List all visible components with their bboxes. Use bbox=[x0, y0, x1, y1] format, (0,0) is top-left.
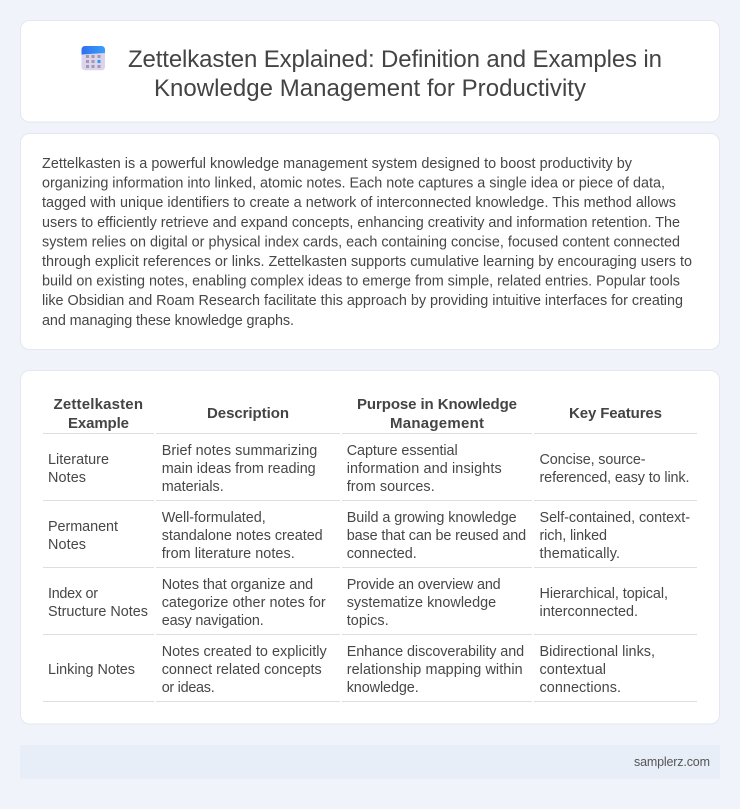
panel: examples table bbox=[20, 370, 720, 724]
table row: permanent notes: Self-contained, context- bbox=[540, 510, 690, 526]
table row: index or structure notes bbox=[43, 577, 697, 635]
table header row: Zettelkasten bbox=[54, 396, 143, 413]
table row: permanent notes: Permanent bbox=[48, 519, 118, 535]
text block: definition: and managing these knowledge graphs. bbox=[42, 313, 294, 329]
table row: index or structure notes: Provide an overview and bbox=[347, 577, 501, 593]
table row: linking notes: connect related concepts bbox=[162, 662, 322, 678]
text block: definition: system relies on digital or physical index cards, each containing concise, focused content connected bbox=[42, 234, 680, 250]
table row: index or structure notes: Hierarchical, topical, bbox=[540, 586, 668, 602]
panel: intro paragraph bbox=[20, 134, 720, 350]
table row: literature notes: Capture essential bbox=[347, 443, 458, 459]
table row: linking notes: Linking Notes bbox=[48, 662, 135, 678]
table row: linking notes: knowledge. bbox=[347, 680, 419, 696]
table row: literature notes: Brief notes summarizing bbox=[162, 443, 317, 459]
title bbox=[128, 46, 662, 102]
table header row bbox=[43, 396, 697, 434]
text block: definition: like Obsidian and Roam Research facilitate this approach by providing intuitive interfaces for creating bbox=[42, 293, 683, 309]
table row: literature notes: main ideas from reading bbox=[162, 461, 316, 477]
footer: samplerz.com bbox=[634, 755, 710, 769]
text block: definition: build on existing notes, enabling complex ideas to emerge from simple, related entries. Popular tools bbox=[42, 274, 680, 290]
table row: literature notes: referenced, easy to link. bbox=[540, 470, 690, 486]
text block: definition: Zettelkasten is a powerful knowledge management system designed to boost productivity by bbox=[42, 156, 633, 172]
table row: permanent notes: standalone notes created bbox=[162, 528, 323, 544]
table row: index or structure notes: topics. bbox=[347, 613, 389, 629]
table row: permanent notes: Well-formulated, bbox=[162, 510, 266, 526]
table row: linking notes: contextual bbox=[540, 662, 606, 678]
table row: index or structure notes: systematize knowledge bbox=[347, 595, 496, 611]
table row: linking notes: or ideas. bbox=[162, 680, 215, 696]
table row: linking notes: relationship mapping within bbox=[347, 662, 523, 678]
table row: linking notes: Notes created to explicitly bbox=[162, 644, 327, 660]
table row: literature notes: information and insights bbox=[347, 461, 502, 477]
table row: permanent notes: Notes bbox=[48, 537, 86, 553]
table row: linking notes: connections. bbox=[540, 680, 621, 696]
table row: literature notes: Concise, source- bbox=[540, 452, 646, 468]
table row: literature notes: from sources. bbox=[347, 479, 435, 495]
text block: definition: organizing information into linked, atomic notes. Each note captures a single idea or piece of data, bbox=[42, 176, 665, 192]
table row: linking notes: Enhance discoverability and bbox=[347, 644, 524, 660]
table row: permanent notes: rich, linked bbox=[540, 528, 607, 544]
text block: definition: users to efficiently retrieve and expand concepts, enhancing creativity and information retention. The bbox=[42, 215, 680, 231]
table row: linking notes: Bidirectional links, bbox=[540, 644, 655, 660]
table header row: Management bbox=[390, 415, 484, 432]
table row: permanent notes: connected. bbox=[347, 546, 417, 562]
icon: calendar bbox=[82, 46, 105, 70]
table row: permanent notes: thematically. bbox=[540, 546, 620, 562]
panel: title header bbox=[20, 20, 720, 122]
table row: permanent notes bbox=[43, 510, 697, 568]
table row: literature notes: materials. bbox=[162, 479, 224, 495]
table row: literature notes: Literature bbox=[48, 452, 109, 468]
footer bbox=[20, 745, 720, 779]
table row: permanent notes: base that can be reused and bbox=[347, 528, 526, 544]
title: Zettelkasten Explained: Definition and Examples in bbox=[128, 46, 662, 73]
table header row: Description bbox=[207, 405, 289, 422]
table row: permanent notes: from literature notes. bbox=[162, 546, 295, 562]
table row: index or structure notes: Index or bbox=[48, 586, 98, 602]
table header row: Key Features bbox=[569, 405, 662, 422]
table row: index or structure notes: categorize other notes for bbox=[162, 595, 326, 611]
table row: linking notes bbox=[43, 644, 697, 702]
text block: definition: through explicit references or links. Zettelkasten supports cumulative learning by encouraging users to bbox=[42, 254, 692, 270]
text block: definition: tagged with unique identifiers to create a network of interconnected knowledge. This method allows bbox=[42, 195, 676, 211]
table row: index or structure notes: Structure Notes bbox=[48, 604, 148, 620]
table row: index or structure notes: Notes that organize and bbox=[162, 577, 313, 593]
table header row: Example bbox=[68, 415, 129, 432]
table row: literature notes bbox=[43, 443, 697, 501]
table row: index or structure notes: interconnected. bbox=[540, 604, 638, 620]
table row: literature notes: Notes bbox=[48, 470, 86, 486]
table row: permanent notes: Build a growing knowledge bbox=[347, 510, 517, 526]
table row: index or structure notes: easy navigation. bbox=[162, 613, 264, 629]
text block: definition bbox=[42, 156, 692, 329]
title: Knowledge Management for Productivity bbox=[154, 75, 586, 102]
table header row: Purpose in Knowledge bbox=[357, 396, 517, 413]
